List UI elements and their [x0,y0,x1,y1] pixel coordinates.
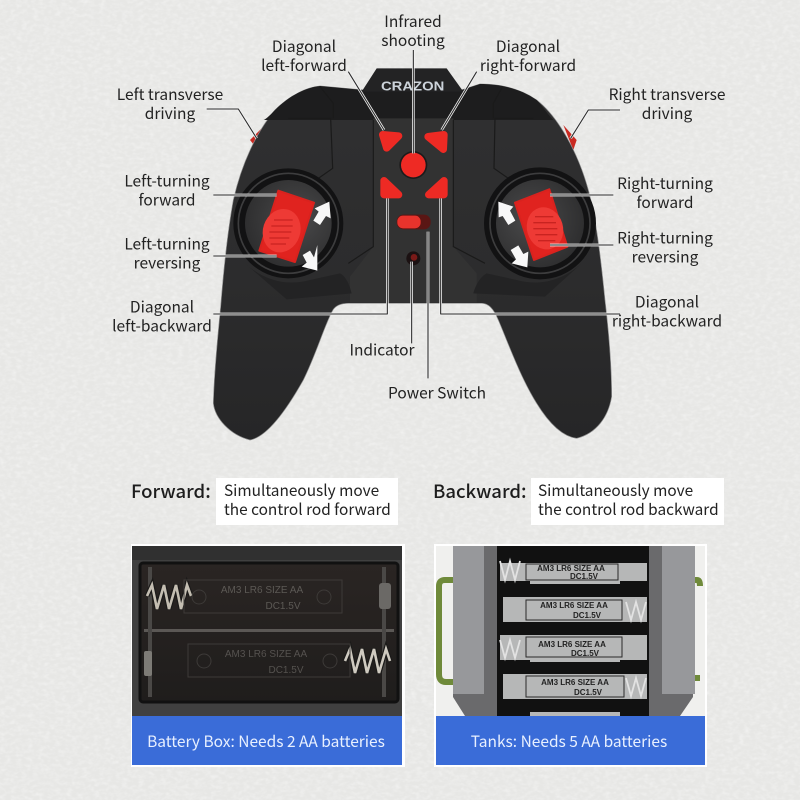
label: power switch: Power Switch [388,382,486,404]
caption bar: Battery Box: Needs 2 AA batteries [147,730,385,752]
battery tray: DC1.5V [571,649,600,658]
backward instruction: Simultaneously move [538,479,693,501]
forward instruction [131,478,398,525]
label: left transverse driving: driving [145,102,195,124]
battery tray: DC1.5V [574,688,603,697]
battery tray: AM3 LR6 SIZE AA [538,640,606,649]
right joystick [484,167,596,279]
label: right-turning forward: forward [636,191,694,213]
label: diagonal right-forward: Diagonal [496,35,560,57]
label: diagonal right-backward: Diagonal [635,290,699,312]
battery tray: AM3 LR6 SIZE AA [540,601,608,610]
caption bar: Tanks: Needs 5 AA batteries [471,730,667,752]
red direction buttons [383,135,444,195]
leader lines [207,50,620,378]
battery compartment: AM3 LR6 SIZE AA [225,649,307,660]
tank side rails [453,546,695,716]
label: indicator: Indicator [349,338,416,360]
controller illustration [207,50,620,440]
backward instruction [433,478,724,525]
springs [147,585,191,609]
red stick [515,189,568,260]
forward instruction: Forward: [131,478,211,504]
body panel seams [288,87,533,263]
label: left-turning reversing: reversing [134,252,201,274]
label: right transverse driving: driving [642,102,692,124]
label: infrared shooting: shooting [381,29,445,51]
label: diagonal left-forward: Diagonal [272,35,336,57]
label: left-turning reversing: Left-turning [124,232,210,254]
label: right-turning reversing: Right-turning [617,226,713,248]
top darker band [263,84,553,120]
caption bar [436,716,705,765]
battery tray [497,546,649,716]
moulded labels [184,580,350,677]
power switch [397,215,431,229]
backward instruction: the control rod backward [538,498,719,520]
battery compartment: DC1.5V [268,665,304,676]
label: diagonal right-backward: right-backward [612,310,722,332]
label: right-turning reversing: reversing [632,246,699,268]
red stick [257,191,314,262]
panel: battery box [131,544,405,767]
label: right-turning forward: Right-turning [617,172,713,194]
left joystick [233,168,343,278]
logo tab [362,68,463,94]
label: left-turning forward: forward [138,188,196,210]
battery compartment: AM3 LR6 SIZE AA [221,585,303,596]
contact plates [379,583,391,609]
panel: tank batteries [434,544,707,767]
green handles [439,580,700,682]
backward instruction: Backward: [433,478,526,504]
forward instruction: Simultaneously move [224,479,379,501]
label: left-turning forward: Left-turning [124,170,210,192]
arrows [498,202,528,267]
battery tray: AM3 LR6 SIZE AA [541,678,609,687]
label: left transverse driving: Left transverse [117,83,223,105]
label: infrared shooting: Infrared [384,10,442,32]
caption bar [132,716,402,765]
battery tray: DC1.5V [573,611,602,620]
moulded label outlines [526,564,624,697]
label: diagonal left-forward: left-forward [261,54,347,76]
centre plate [350,118,477,303]
battery compartment: DC1.5V [265,601,301,612]
forward instruction: the control rod forward [224,498,391,520]
red side triggers [250,125,577,150]
indicator light [406,251,420,265]
arrows [302,202,331,271]
springs [500,561,646,696]
label: diagonal left-backward: Diagonal [130,296,194,318]
battery tray: AM3 LR6 SIZE AA [537,564,605,573]
lower joystick collars [245,263,582,299]
controller body [213,84,612,440]
logo tab: CRAZON [381,80,444,94]
battery tray: DC1.5V [570,572,599,581]
label: diagonal left-backward: left-backward [112,314,212,336]
label: right transverse driving: Right transverse [609,83,725,105]
battery compartment [140,563,398,702]
label: diagonal right-forward: right-forward [480,54,576,76]
